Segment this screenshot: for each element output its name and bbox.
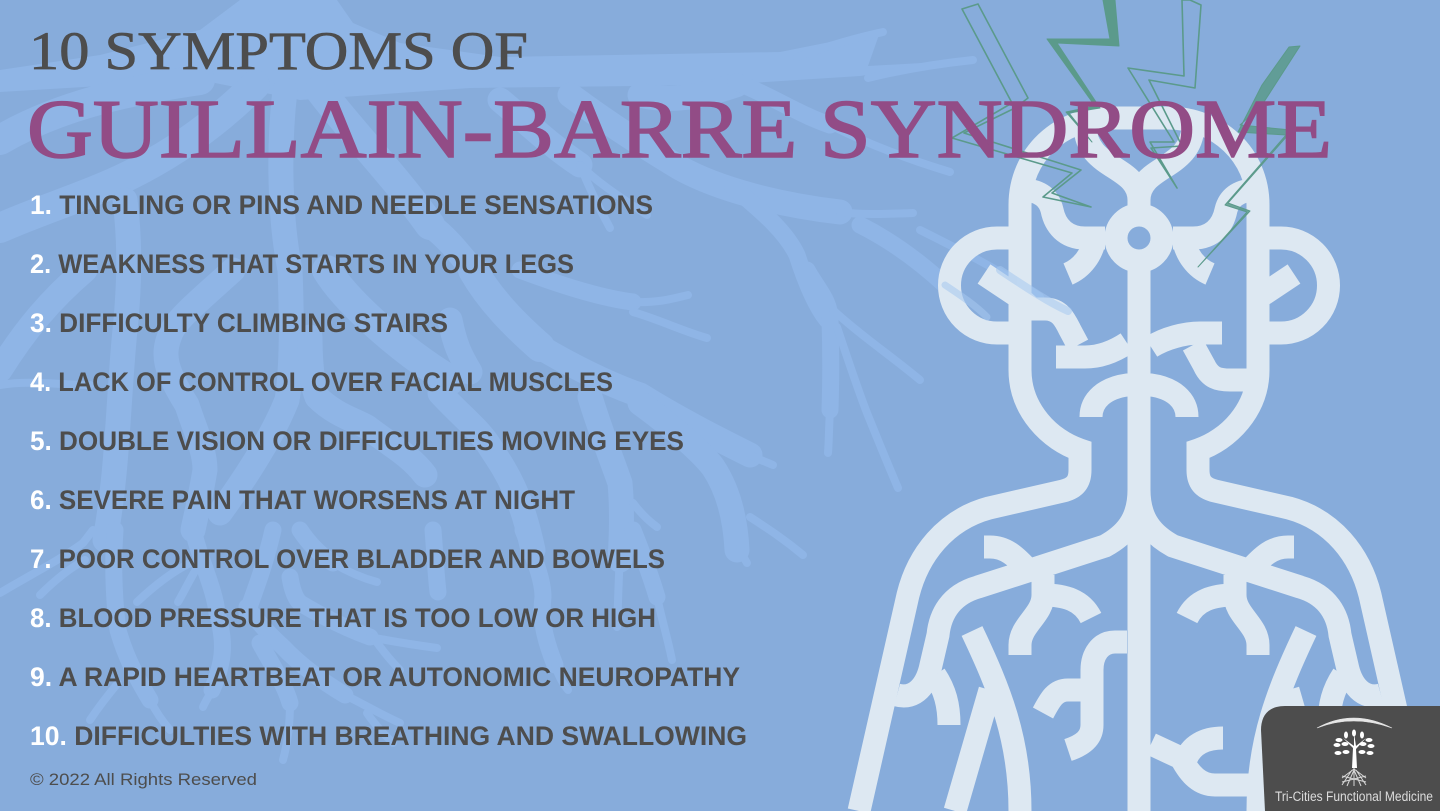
head outline (1020, 118, 1258, 345)
figure: nervous system body (859, 118, 1419, 811)
symptom 6: 6. SEVERE PAIN THAT WORSENS AT NIGHT (30, 485, 575, 515)
lightning bolts (952, 0, 1300, 267)
ear twigs (984, 274, 1078, 345)
symptom 8: 8. BLOOD PRESSURE THAT IS TOO LOW OR HIGH (30, 603, 656, 633)
logo roots (1342, 768, 1366, 786)
symptom 4: 4. LACK OF CONTROL OVER FACIAL MUSCLES (30, 367, 613, 397)
ears (950, 238, 1020, 333)
bolt: centre outline (1128, 0, 1201, 188)
symptom 9: 9. A RAPID HEARTBEAT OR AUTONOMIC NEUROPATHY (30, 662, 740, 692)
logo tree (1334, 730, 1374, 768)
symptom 3: 3. DIFFICULTY CLIMBING STAIRS (30, 308, 448, 338)
title: line two: GUILLAIN-BARRE SYNDROME (27, 83, 1332, 176)
torso lines (972, 631, 1020, 811)
cross nerve (1056, 343, 1127, 357)
jaw arc (1091, 385, 1187, 417)
symptom 10: 10. DIFFICULTIES WITH BREATHING AND SWALLOWING (30, 721, 747, 751)
upper brain bowl (1085, 125, 1193, 200)
symptom 2: 2. WEAKNESS THAT STARTS IN YOUR LEGS (30, 249, 574, 279)
copyright: © 2022 All Rights Reserved (30, 770, 257, 789)
background: nerve roots (0, 0, 1040, 760)
title: line one: 10 SYMPTOMS OF (29, 21, 528, 81)
symptom 1: 1. TINGLING OR PINS AND NEEDLE SENSATIONS (30, 190, 653, 220)
bolt: top filled (1047, 0, 1119, 142)
chest branches (984, 547, 1030, 572)
shoulder nerves (897, 490, 1139, 696)
root tips over figure (945, 270, 1068, 317)
bolt: left outline (952, 4, 1091, 207)
logo panel (1261, 706, 1440, 811)
gut nerves (1068, 642, 1127, 750)
outer body outline (859, 340, 1080, 811)
symptom list (30, 190, 747, 751)
bolt: right filled (1198, 46, 1300, 267)
symptom 7: 7. POOR CONTROL OVER BLADDER AND BOWELS (30, 544, 665, 574)
brain branches (1025, 190, 1105, 238)
brain ring (1116, 215, 1162, 261)
symptom 5: 5. DOUBLE VISION OR DIFFICULTIES MOVING EYES (30, 426, 684, 456)
logo arc (1317, 718, 1392, 728)
spine (1128, 195, 1150, 811)
